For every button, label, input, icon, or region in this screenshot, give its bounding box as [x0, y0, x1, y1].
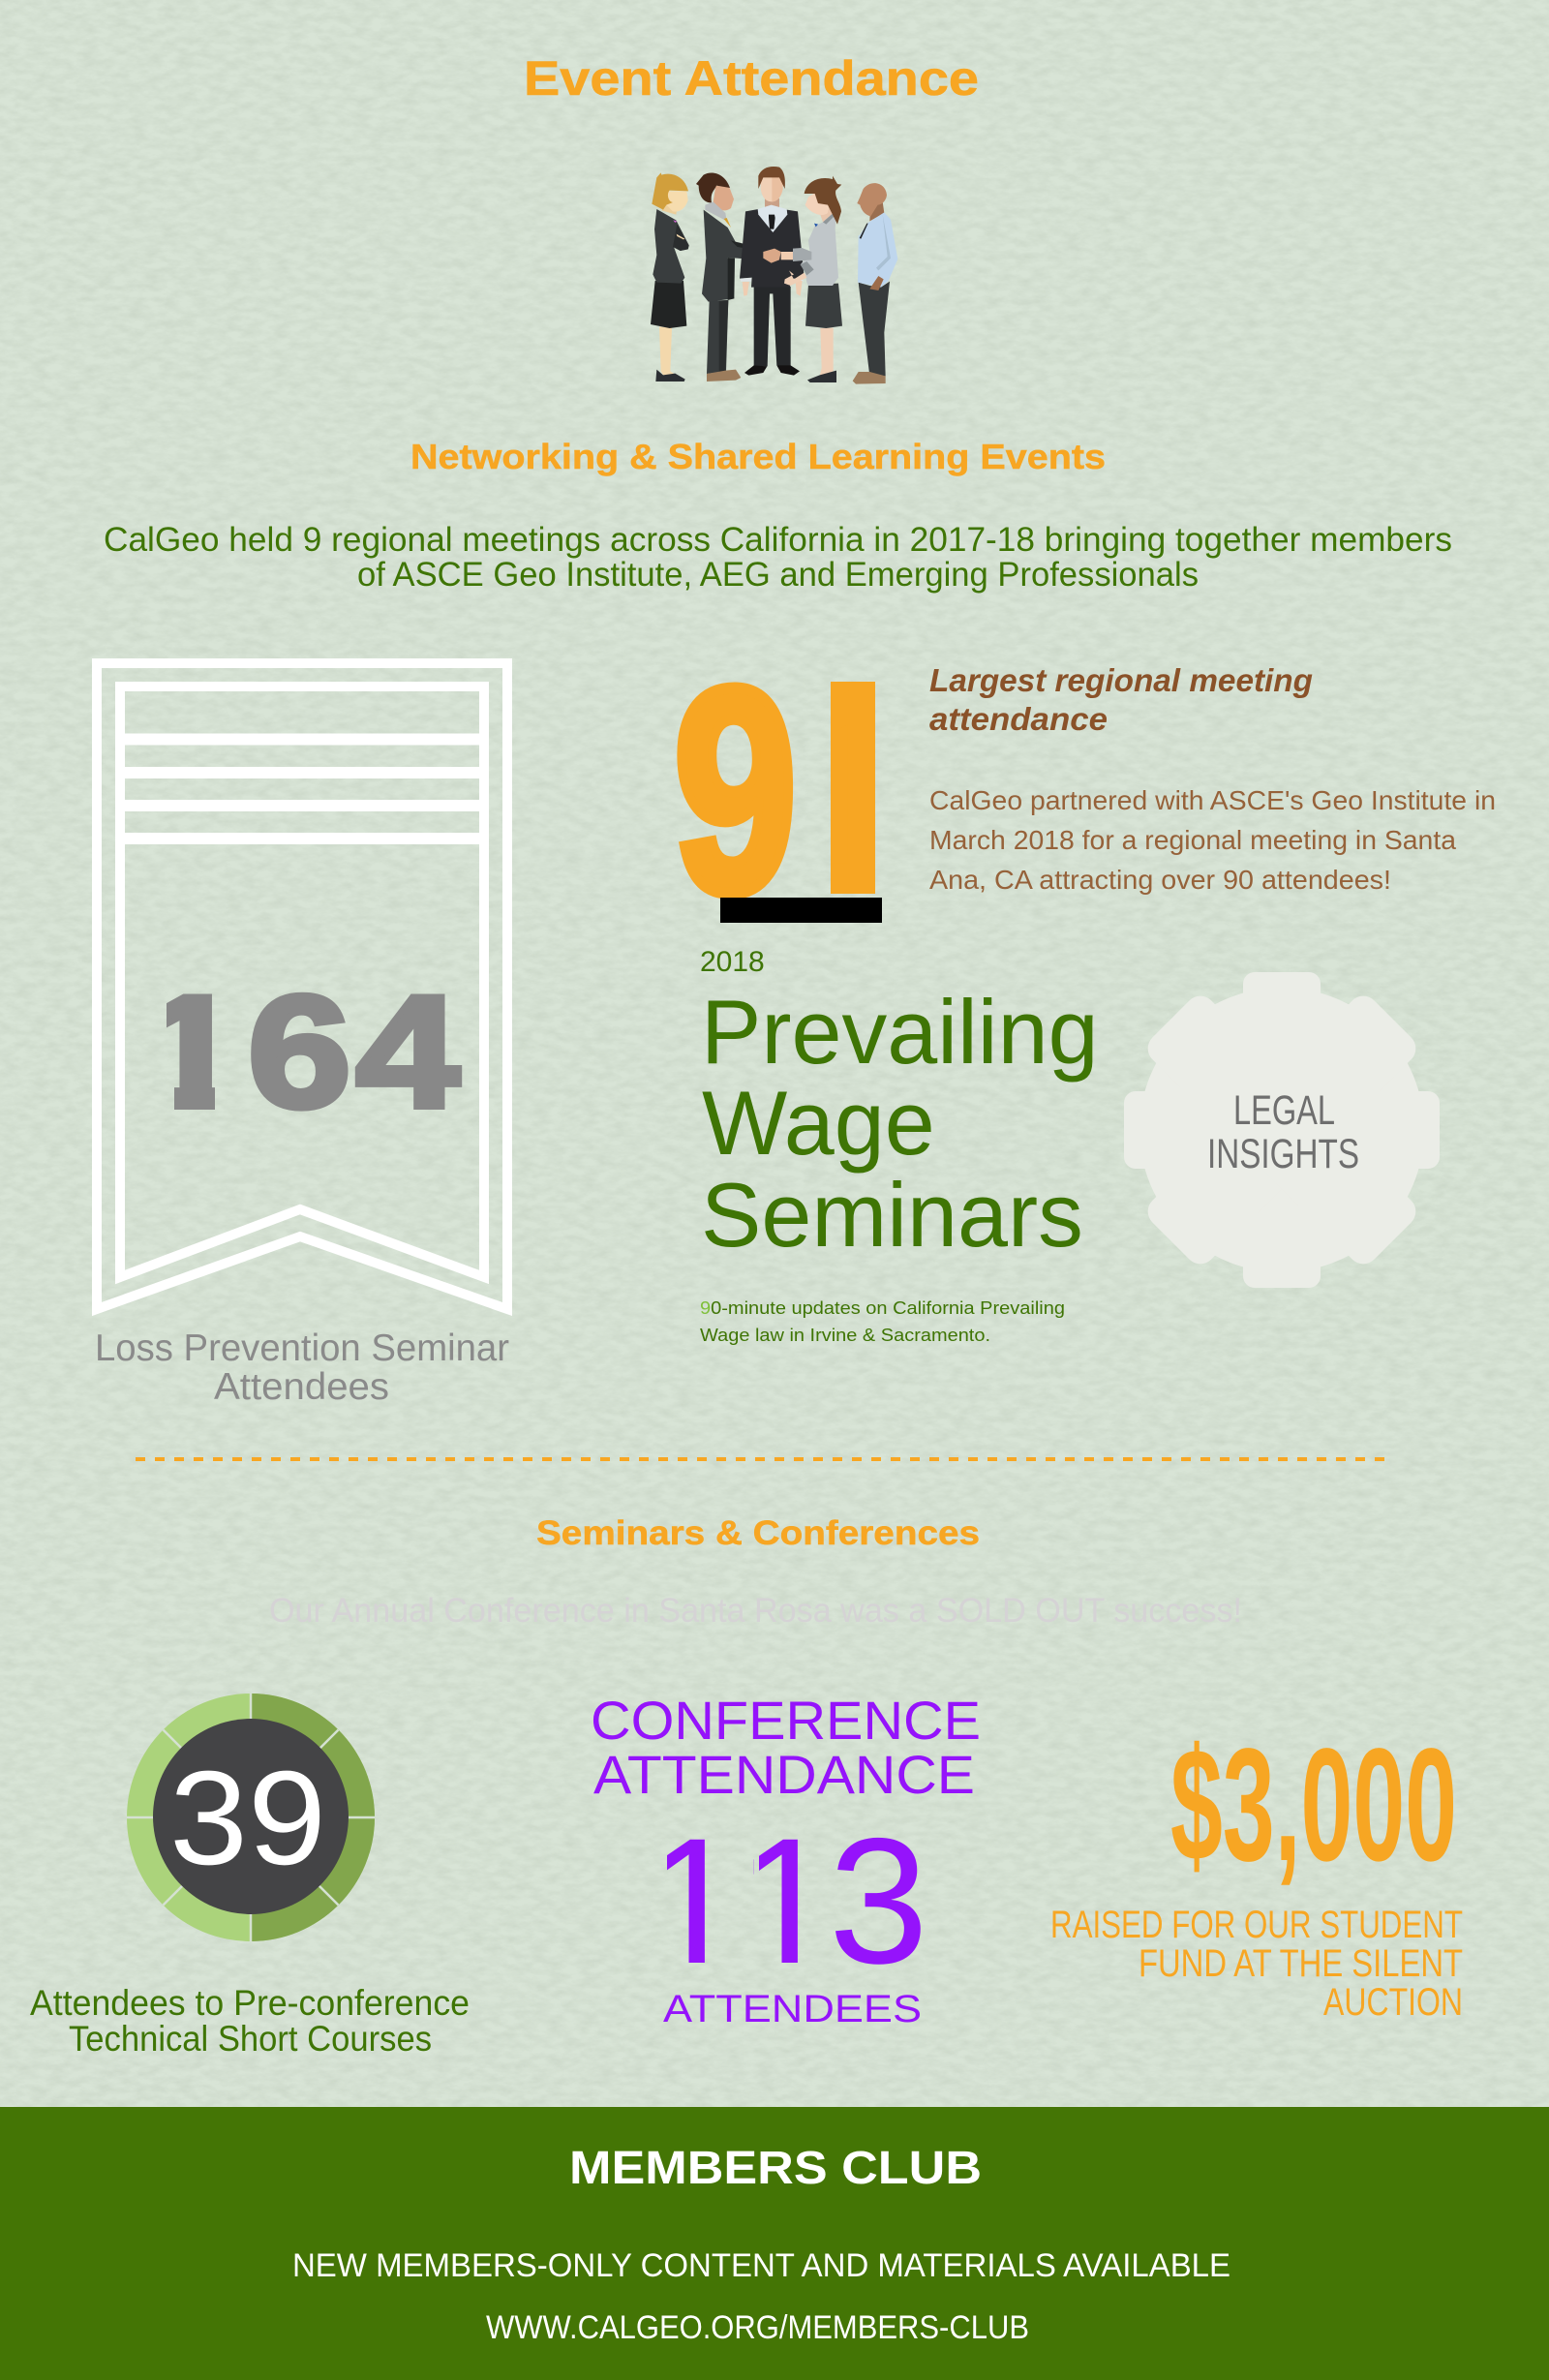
heading: prevailing wage seminars: Wage [702, 1072, 935, 1174]
icon: group of business people shaking hands [651, 167, 897, 384]
heading: prevailing wage seminars: Prevailing [701, 981, 1099, 1083]
text: faint sold out note: Our Annual Conference in Santa Rosa was a SOLD OUT success! [269, 1592, 1242, 1630]
panel: members club footer [0, 2107, 1549, 2380]
text block: student fund note: FUND AT THE SILENT [1139, 1942, 1463, 1985]
heading: conference attendance: CONFERENCE [591, 1690, 981, 1751]
badge: legal insights gear [1124, 972, 1440, 1288]
number: 91: 9 [674, 627, 797, 953]
icon: gear shape [1124, 972, 1440, 1288]
heading: conference attendance: ATTENDANCE [593, 1744, 975, 1805]
label: short course attendees: Technical Short Courses [69, 2019, 432, 2059]
label: legal insights: INSIGHTS [1207, 1131, 1359, 1177]
panel: pre-conference short courses [30, 1693, 470, 2059]
text block: regional meetings intro: CalGeo held 9 regional meetings across California in 2017-18 bringing together members [104, 521, 1452, 559]
figure: blonde woman with crossed arms [651, 172, 689, 381]
text: members club url: WWW.CALGEO.ORG/MEMBERS-CLUB [486, 2309, 1029, 2346]
label: loss prevention attendees: Loss Prevention Seminar [95, 1327, 509, 1369]
figure: man in grey suit [696, 173, 764, 381]
figure: central man in black suit [740, 167, 805, 376]
figure: woman in grey blouse [763, 176, 842, 382]
underline bar [720, 898, 882, 923]
heading: networking events: Networking & Shared Learning Events [410, 437, 1106, 476]
icon: ribbon banner outline [97, 663, 507, 1309]
number: 113: 113 [644, 1802, 928, 2001]
text block: partnership description: March 2018 for a regional meeting in Santa [929, 825, 1456, 855]
label: year 2018: 2018 [700, 946, 765, 978]
panel: silent auction total [1050, 1716, 1463, 2024]
number: 91 [677, 682, 875, 899]
heading: seminars and conferences: Seminars & Conferences [536, 1514, 980, 1552]
label: loss prevention attendees: Attendees [214, 1366, 389, 1408]
text block: regional meetings intro: of ASCE Geo Institute, AEG and Emerging Professionals [357, 556, 1199, 594]
heading: conference attendance [591, 1690, 981, 1805]
label: short course attendees [30, 1983, 470, 2059]
text block: student fund note: AUCTION [1323, 1981, 1463, 2024]
footer background [0, 2107, 1549, 2380]
figure: bald man in blue shirt [853, 183, 897, 384]
heading: largest regional meeting attendance [929, 662, 1313, 737]
number: 91: 1 [774, 626, 949, 957]
panel: loss prevention seminar banner [95, 663, 509, 1408]
text block: seminar description: 90-minute updates on California Prevailing [700, 1298, 1065, 1318]
heading: largest regional meeting attendance: attendance [929, 701, 1108, 737]
label: legal insights: LEGAL [1233, 1087, 1335, 1134]
heading: prevailing wage seminars [701, 981, 1099, 1266]
label: attendees: ATTENDEES [663, 1988, 922, 2030]
label: short course attendees: Attendees to Pre-conference [30, 1983, 470, 2023]
chart: segmented ring with number 39 [127, 1693, 375, 1941]
heading: members club: MEMBERS CLUB [569, 2143, 982, 2194]
text block: seminar description: Wage law in Irvine & Sacramento. [700, 1326, 990, 1345]
text block: partnership description [929, 785, 1496, 895]
text: members-only content: NEW MEMBERS-ONLY CONTENT AND MATERIALS AVAILABLE [292, 2247, 1230, 2284]
panel: largest regional meeting [677, 668, 1495, 923]
label: legal insights [1207, 1087, 1359, 1177]
text block: partnership description: Ana, CA attracting over 90 attendees! [929, 865, 1391, 895]
panel: prevailing wage seminars [700, 946, 1099, 1345]
heading: prevailing wage seminars: Seminars [701, 1164, 1083, 1266]
heading: largest regional meeting attendance: Largest regional meeting [929, 662, 1313, 698]
text block: regional meetings intro [104, 521, 1452, 594]
number: 39: 39 [169, 1744, 326, 1893]
text block: partnership description: CalGeo partnered with ASCE's Geo Institute in [929, 785, 1496, 815]
text block: student fund note [1050, 1904, 1463, 2024]
text block: seminar description [700, 1298, 1065, 1345]
title: Event Attendance [524, 51, 979, 106]
label: loss prevention attendees [95, 1327, 509, 1408]
number: 164: 164 [139, 962, 460, 1142]
panel: conference attendance [591, 1690, 981, 2030]
